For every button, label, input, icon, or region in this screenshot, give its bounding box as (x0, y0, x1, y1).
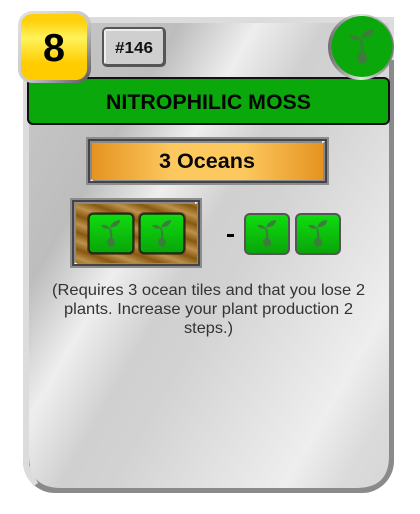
description text: (Requires 3 ocean tiles and that you lose 2 (52, 282, 365, 299)
description text: plants. Increase your plant production 2 (64, 301, 353, 318)
minus sign (227, 234, 234, 237)
tag icon: plant (328, 14, 394, 80)
title text: NITROPHILIC MOSS (106, 91, 311, 114)
requirement box (86, 137, 329, 185)
cost badge (18, 11, 91, 83)
description text (52, 282, 365, 337)
cost number: 8 (43, 27, 65, 70)
production box (70, 198, 202, 268)
requirement text: 3 Oceans (159, 150, 255, 173)
plant loss tile 2 (295, 213, 341, 255)
card number badge (102, 27, 166, 67)
number text: #146 (115, 40, 153, 57)
production plant tile 2 (138, 212, 186, 255)
description text: steps.) (184, 320, 233, 337)
title bar (28, 78, 389, 124)
production plant tile 1 (87, 212, 135, 255)
plant loss tile 1 (244, 213, 290, 255)
